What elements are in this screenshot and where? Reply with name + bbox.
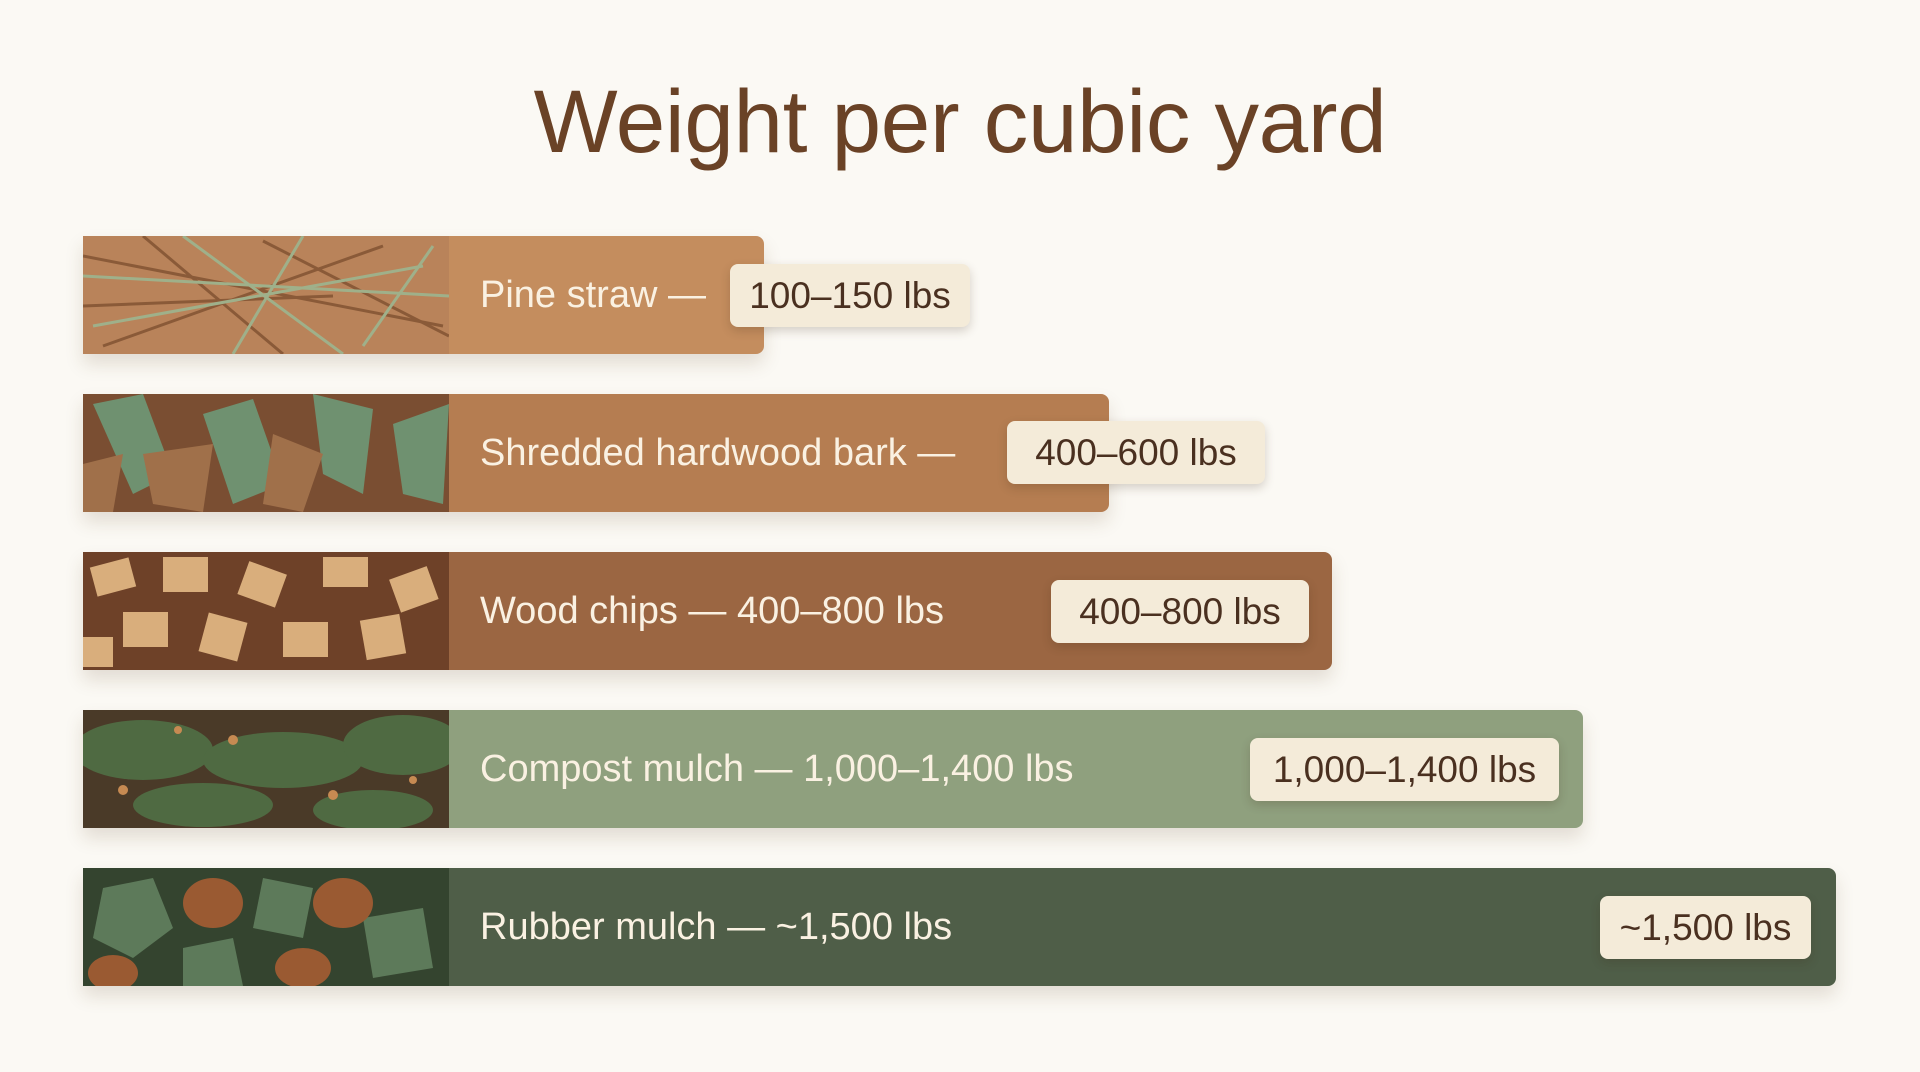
texture: wood chips — [83, 552, 449, 670]
texture: pine straw — [83, 236, 449, 354]
value pill — [1250, 738, 1559, 801]
label: Shredded hardwood bark — — [480, 432, 955, 474]
bar: rubber mulch — [83, 868, 1836, 986]
bar: pine straw — [83, 236, 764, 354]
value pill: 1,000–1,400 lbs — [1273, 749, 1536, 790]
texture: compost — [83, 710, 449, 828]
value pill — [1600, 896, 1811, 959]
texture: rubber — [83, 868, 449, 986]
value pill — [1051, 580, 1309, 643]
value pill: 100–150 lbs — [749, 275, 951, 316]
bar: wood chips — [83, 552, 1332, 670]
texture: bark — [83, 394, 449, 512]
bar: compost mulch — [83, 710, 1583, 828]
label: Wood chips — 400–800 lbs — [480, 590, 944, 632]
bar: shredded hardwood bark — [83, 394, 1109, 512]
value pill: ~1,500 lbs — [1620, 907, 1791, 948]
title: Weight per cubic yard — [534, 71, 1386, 171]
label: Pine straw — — [480, 274, 706, 316]
value pill — [730, 264, 970, 327]
value pill: 400–600 lbs — [1035, 432, 1237, 473]
value pill — [1007, 421, 1265, 484]
label: Rubber mulch — ~1,500 lbs — [480, 906, 952, 948]
label: Compost mulch — 1,000–1,400 lbs — [480, 748, 1074, 790]
value pill: 400–800 lbs — [1079, 591, 1281, 632]
